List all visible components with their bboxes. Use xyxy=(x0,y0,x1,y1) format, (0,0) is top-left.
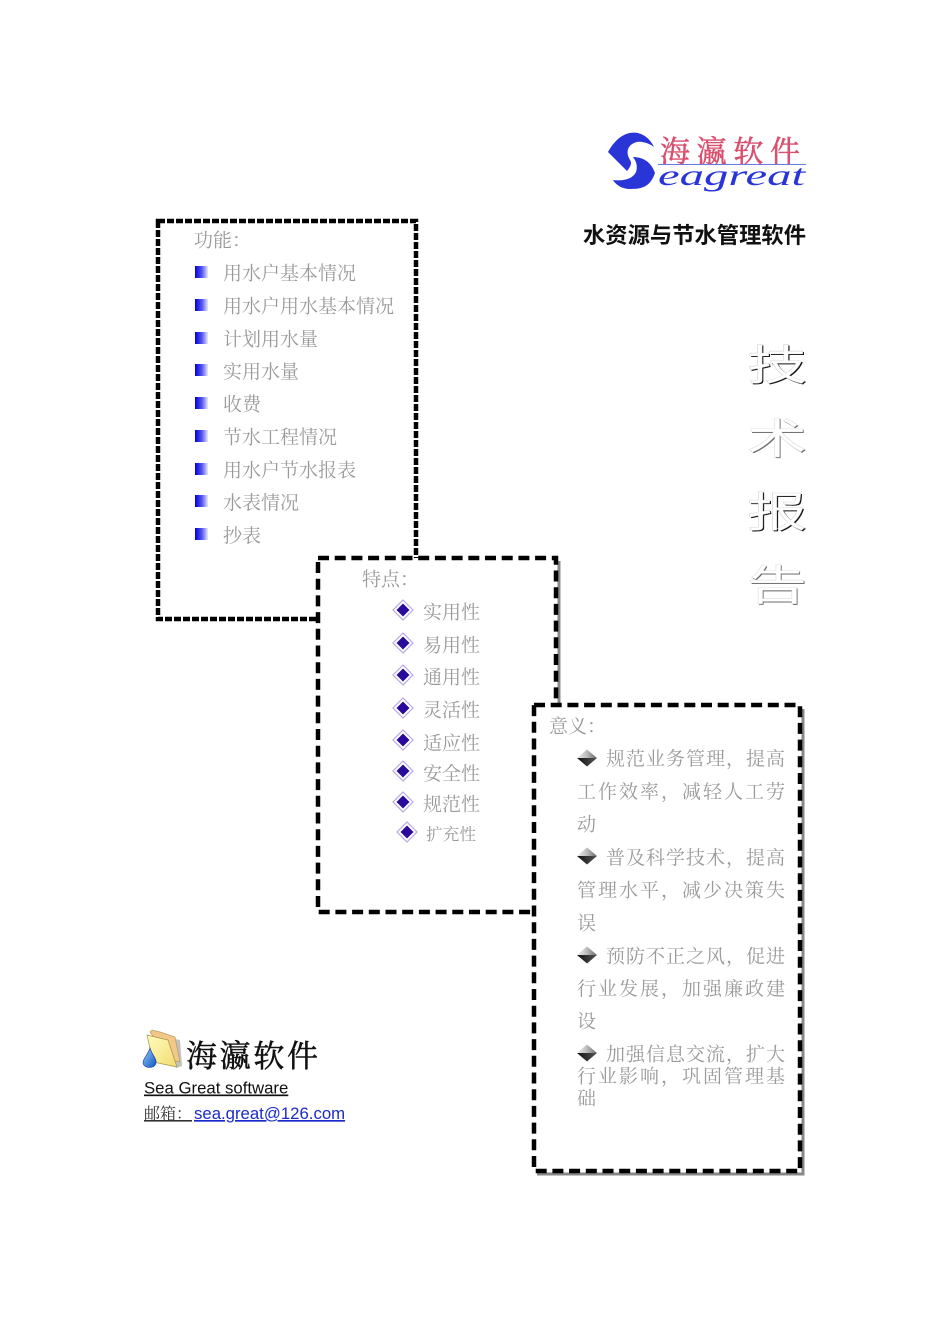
list: 功能 items: 实用水量 xyxy=(223,361,299,383)
title char 告: 告 xyxy=(747,562,807,609)
bullets xyxy=(195,266,208,540)
text: 意义 paragraphs xyxy=(577,748,785,1110)
logo chinese name: 海瀛软件 xyxy=(660,127,800,171)
panel: 特点 xyxy=(318,558,559,912)
list: 特点 items: 规范性 xyxy=(423,794,480,816)
list: 功能 items: 节水工程情况 xyxy=(223,426,337,448)
list: 特点 items: 适应性 xyxy=(423,732,480,754)
list: 特点 items: 扩充性 xyxy=(426,825,476,844)
text: 意义 paragraphs: 行业影响，巩固管理基 xyxy=(577,1066,785,1088)
text: 意义 paragraphs: 工作效率，减轻人工劳 xyxy=(577,781,785,803)
text: 意义 paragraphs: 行业发展，加强廉政建 xyxy=(577,978,785,1000)
bullets xyxy=(577,750,597,1062)
text: 意义 paragraphs: 设 xyxy=(577,1010,596,1032)
email: 邮箱： xyxy=(144,1105,192,1123)
title char 技: 技 xyxy=(748,343,808,390)
subtitle: 水资源与节水管理软件 xyxy=(583,223,806,248)
heading: 特点: 特点： xyxy=(362,568,419,590)
list: 特点 items: 易用性 xyxy=(423,634,480,656)
email: sea.great@126.com xyxy=(194,1104,345,1123)
title char 报: 报 xyxy=(747,489,807,536)
title char 术: 术 xyxy=(747,415,807,462)
company latin name: Sea Great software xyxy=(144,1078,288,1098)
text: 意义 paragraphs: 加强信息交流，扩大 xyxy=(606,1044,785,1066)
list: 功能 items: 用水户基本情况 xyxy=(223,262,356,284)
list: 功能 items: 收费 xyxy=(223,394,262,416)
text: 意义 paragraphs: 预防不正之风，促进 xyxy=(606,946,785,968)
list: 功能 items: 抄表 xyxy=(223,525,261,547)
list: 功能 items: 用水户用水基本情况 xyxy=(223,296,394,318)
footer: company block xyxy=(143,1030,345,1123)
icon: folder with water drop xyxy=(143,1030,182,1068)
vertical title: 技术报告 xyxy=(747,342,808,610)
list: 特点 items: 灵活性 xyxy=(423,700,480,722)
company name calligraphy: 海瀛软件 xyxy=(186,1031,318,1076)
list: 特点 items xyxy=(423,602,480,844)
text: 意义 paragraphs: 础 xyxy=(577,1088,596,1110)
text: 意义 paragraphs: 误 xyxy=(577,912,596,934)
list: 特点 items: 安全性 xyxy=(423,763,480,785)
title char 报: 报 xyxy=(748,490,808,537)
title char 术: 术 xyxy=(748,416,808,463)
list: 特点 items: 通用性 xyxy=(423,666,480,688)
text: 意义 paragraphs: 规范业务管理，提高 xyxy=(606,748,785,770)
list: 特点 items: 实用性 xyxy=(423,602,480,624)
text: 意义 paragraphs: 普及科学技术，提高 xyxy=(606,847,785,869)
heading: 功能: 功能： xyxy=(194,230,251,252)
list: 功能 items xyxy=(223,262,394,547)
diamonds xyxy=(393,600,417,842)
logo: Seagreat xyxy=(608,127,806,192)
icon: blue swirl xyxy=(608,133,655,189)
heading: 意义: 意义： xyxy=(549,716,606,738)
panel: 功能 xyxy=(158,221,416,619)
panel: 意义 xyxy=(534,705,803,1174)
list: 功能 items: 计划用水量 xyxy=(223,328,318,350)
list: 功能 items: 用水户节水报表 xyxy=(223,458,356,482)
title char 告: 告 xyxy=(748,563,808,610)
logo latin name: eagreat xyxy=(658,159,806,192)
text: 意义 paragraphs: 管理水平，减少决策失 xyxy=(577,880,785,902)
title char 技: 技 xyxy=(747,342,807,389)
list: 功能 items: 水表情况 xyxy=(223,492,299,514)
text: 意义 paragraphs: 动 xyxy=(577,814,596,836)
